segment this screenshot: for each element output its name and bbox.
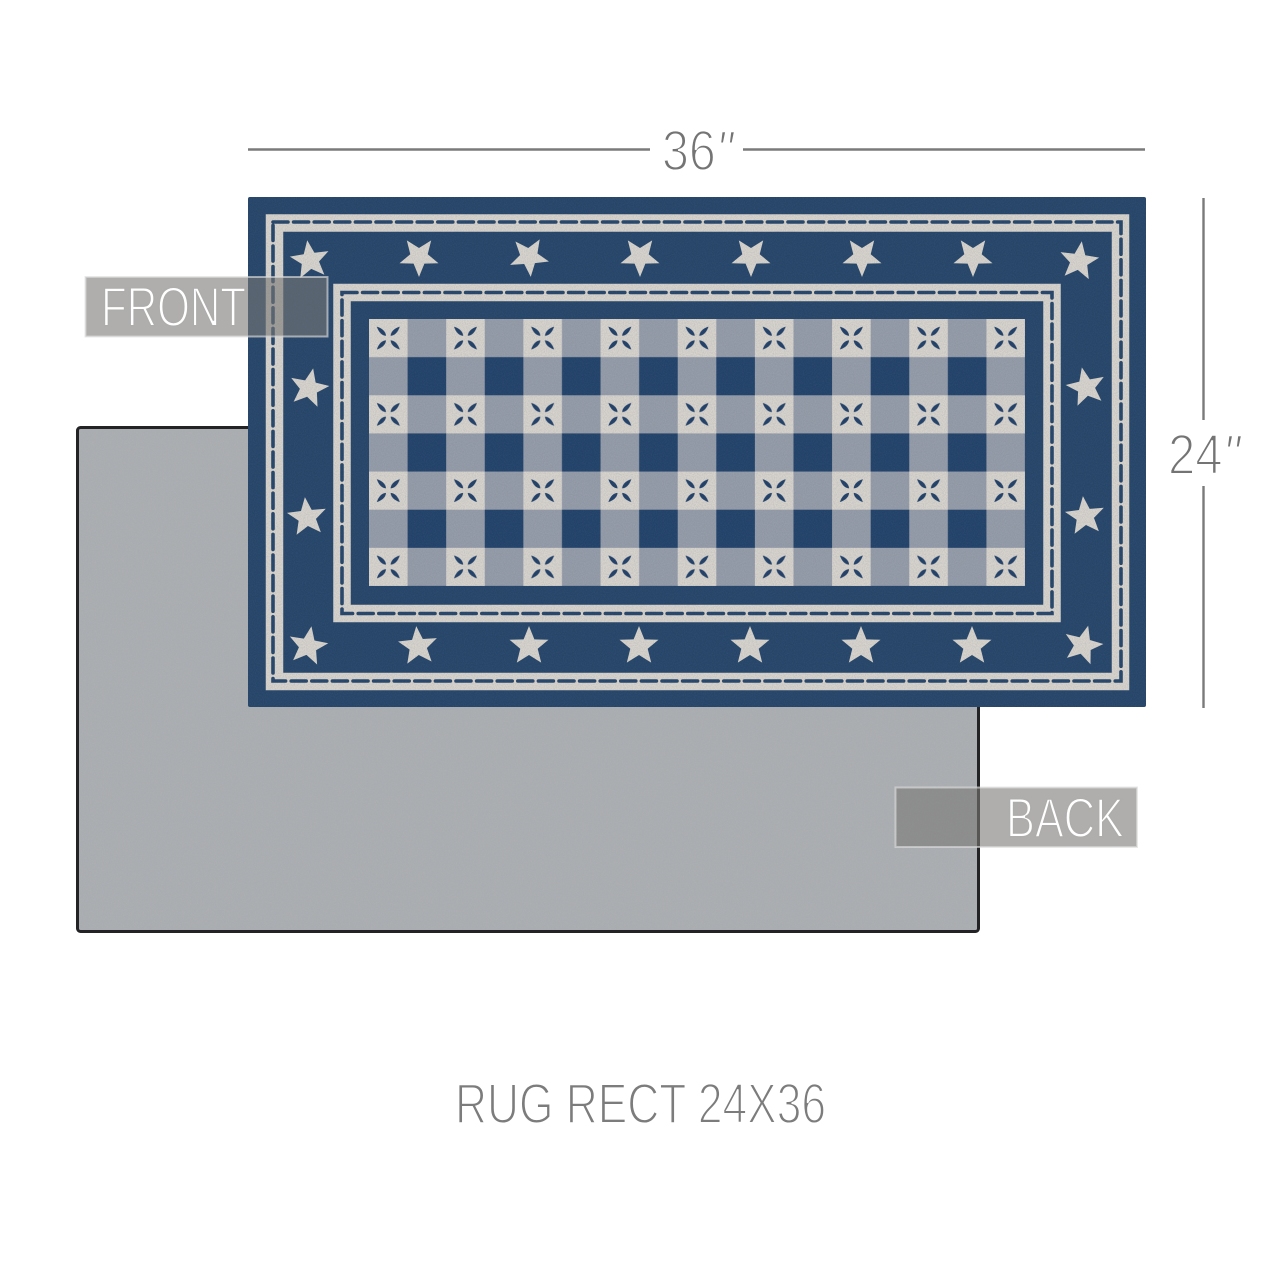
gingham check field with flower squares: [369, 319, 1025, 586]
product caption: RUG RECT 24X36: [455, 1072, 826, 1136]
height dimension: 24 inches: 24": [1168, 423, 1242, 487]
rug back panel: [78, 428, 978, 932]
inner border band: [342, 292, 1052, 614]
outer border band: [273, 222, 1121, 682]
rug front panel: [248, 197, 1146, 707]
border stars: [286, 237, 1109, 666]
back label: BACK: [1006, 786, 1124, 849]
back label: [896, 786, 1137, 849]
width dimension: 36 inches: 36": [662, 119, 735, 183]
front label: FRONT: [101, 275, 246, 338]
